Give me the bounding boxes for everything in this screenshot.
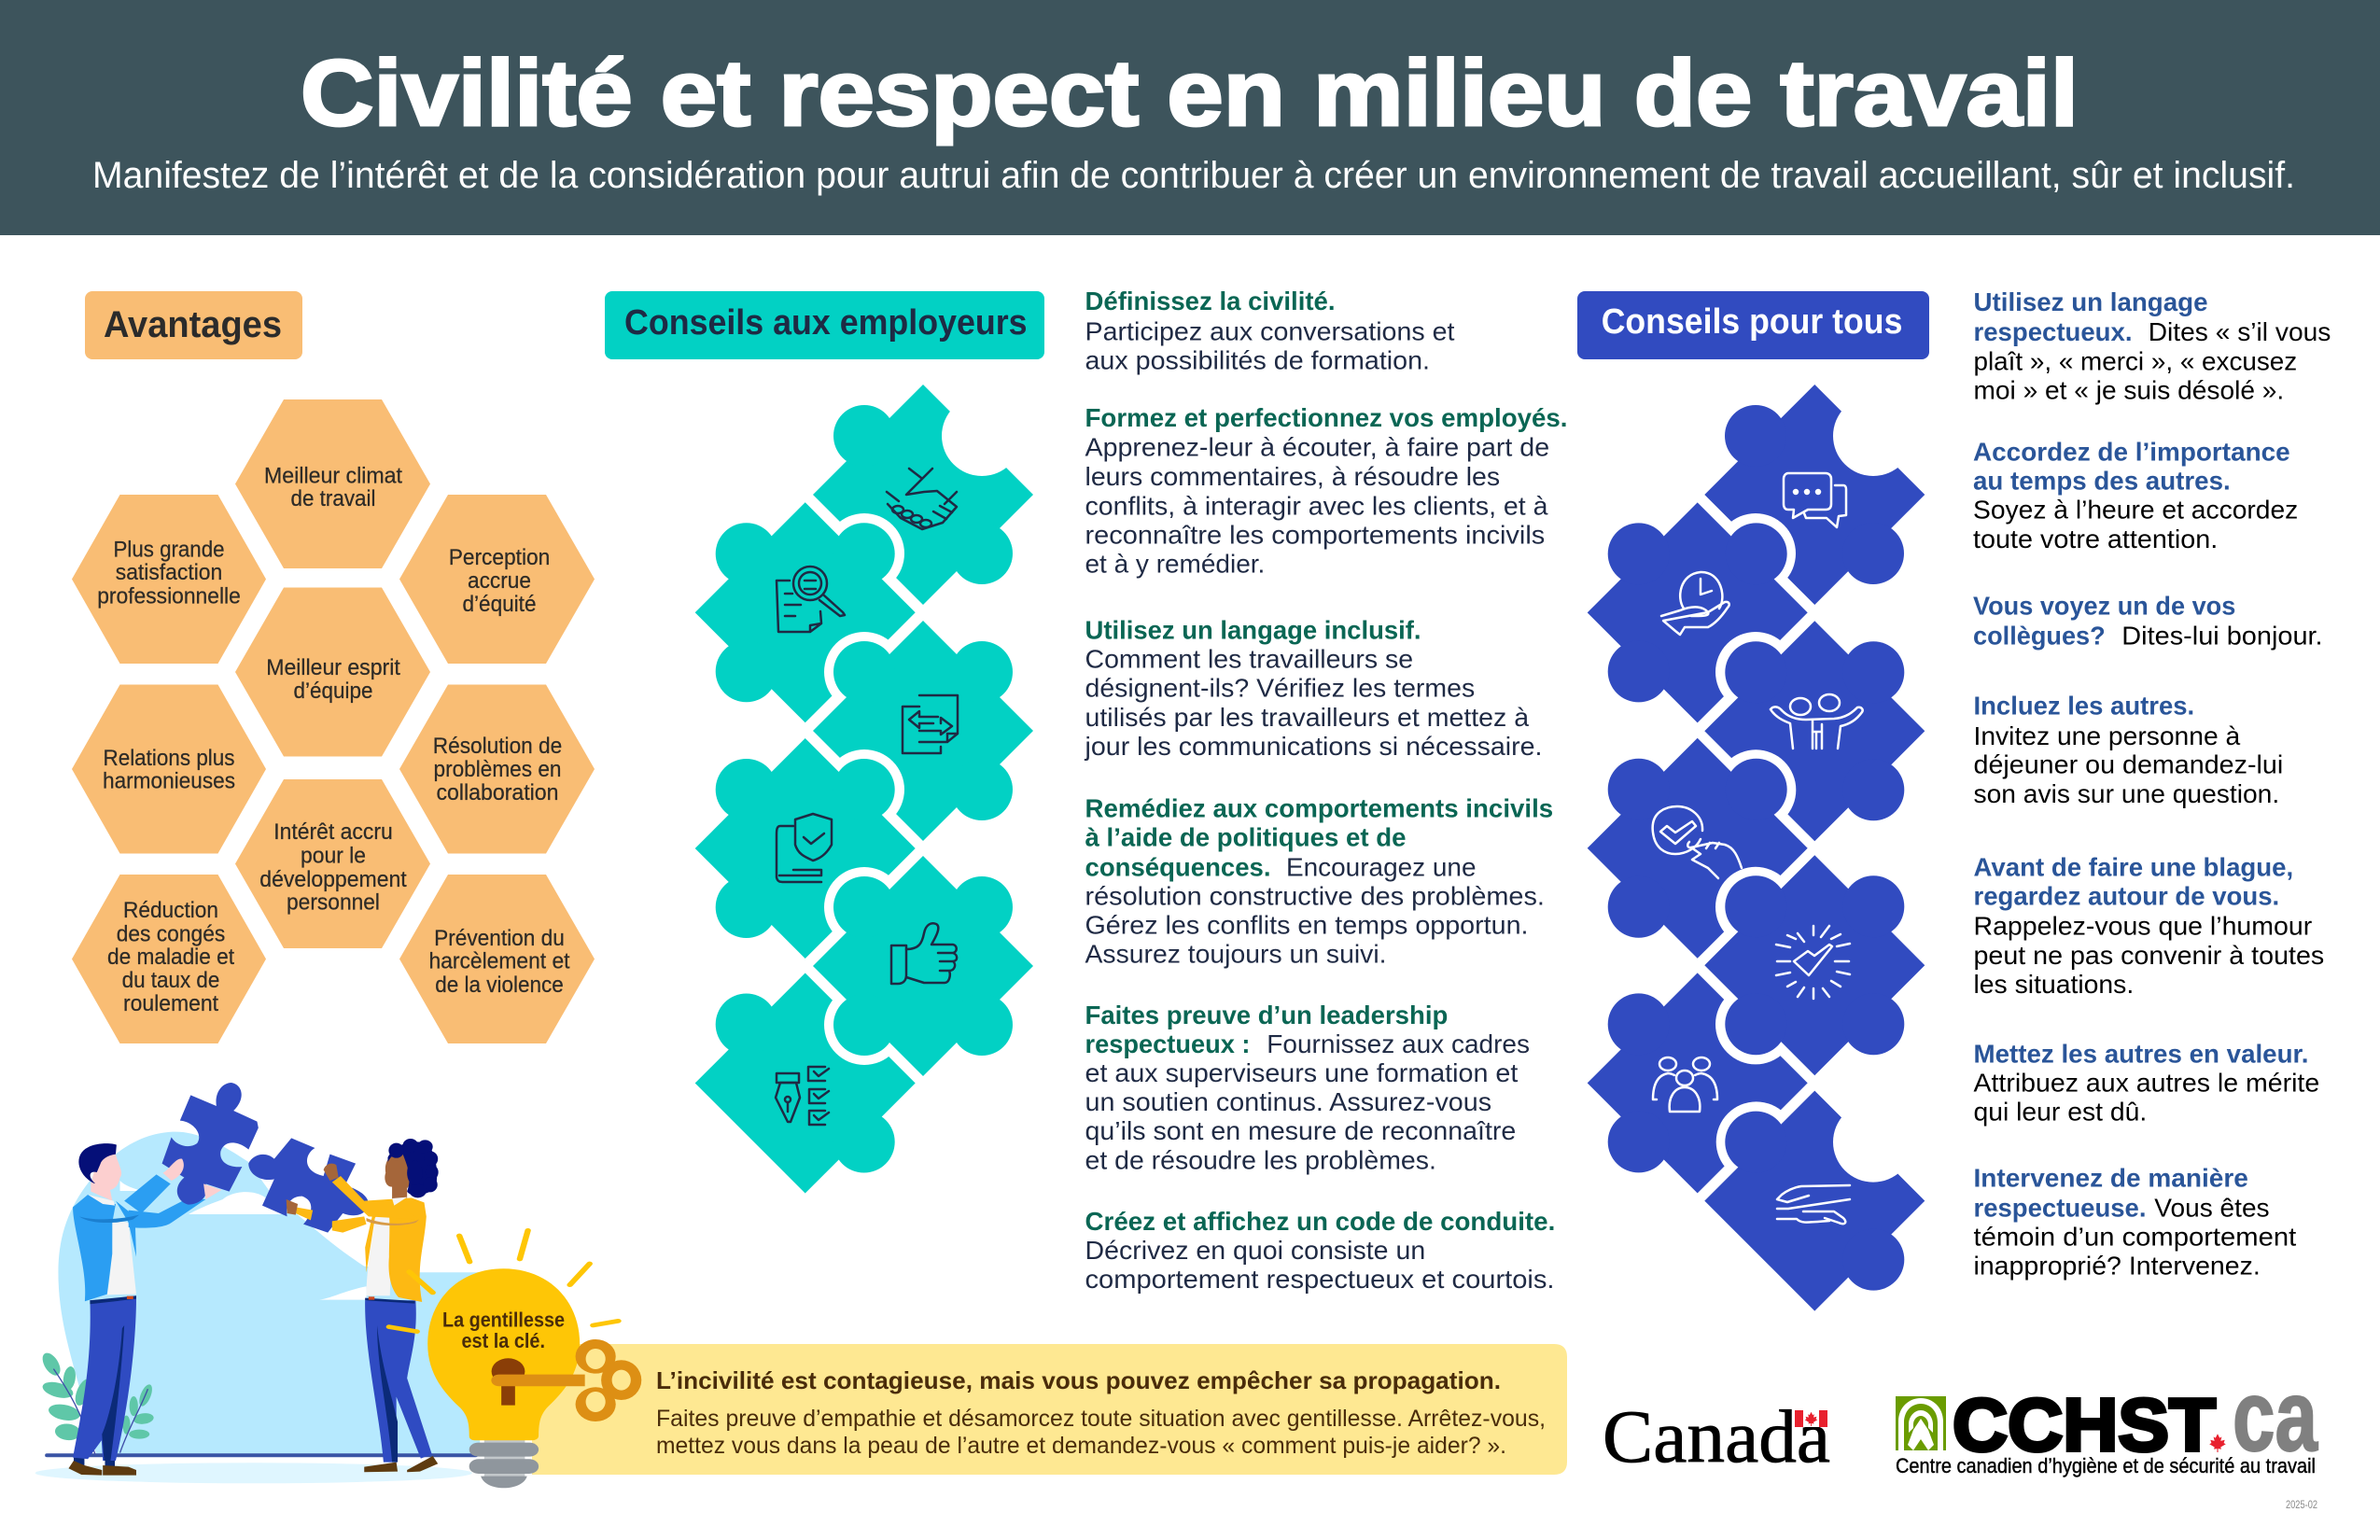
hexagon: Meilleur esprit d'équipe: Meilleur esprit <box>266 655 400 680</box>
tip: Mettez les autres en valeur: Mettez les autres en valeur. <box>1973 1039 2309 1068</box>
tip: Créez et affichez un code de conduite: comportement respectueux et courtois. <box>1085 1265 1555 1294</box>
icon: group of three <box>1653 1057 1717 1112</box>
date code: 2025-02 <box>2286 1498 2317 1511</box>
tip: Remédiez aux comportements incivils: Encouragez une <box>1286 852 1477 881</box>
puzzle piece 1 teal <box>813 385 1033 605</box>
puzzle piece 4 teal <box>695 738 916 959</box>
heading: Conseils aux employeurs: Conseils aux employeurs <box>624 303 1028 343</box>
tip: Avant de faire une blague: regardez autour de vous. <box>1973 881 2279 910</box>
puzzle piece held by man <box>162 1083 259 1205</box>
tip: Utilisez un langage inclusif: Utilisez un langage inclusif. <box>1085 616 1421 644</box>
tip: Utilisez un langage respectueux: Dites « s’il vous <box>2149 317 2331 346</box>
title: Civilité et respect en milieu de travail <box>301 41 2079 146</box>
icon: check with sparkle rays <box>1776 926 1850 999</box>
hexagon: Réduction des congés de maladie: Réduction <box>123 898 218 923</box>
tip: Utilisez un langage respectueux: respectueux. <box>1973 317 2132 346</box>
background blob <box>58 1132 480 1456</box>
tip: Faites preuve d'un leadership respectueux: Fournissez aux cadres <box>1267 1029 1530 1058</box>
hexagon: Meilleur climat de travail <box>235 399 430 568</box>
tip: Incluez les autres: son avis sur une question. <box>1973 779 2279 808</box>
tip: Incluez les autres: Incluez les autres. <box>1973 692 2194 721</box>
hexagon: Perception accrue d'équité <box>399 495 595 664</box>
tip: Utilisez un langage respectueux <box>1973 287 2331 405</box>
panel: blue puzzle column <box>1588 385 1925 1311</box>
tip: Avant de faire une blague: les situations. <box>1973 970 2134 999</box>
puzzle piece 2 teal <box>695 502 916 722</box>
tip: Utilisez un langage inclusif: désignent-ils? Vérifiez les termes <box>1085 674 1475 702</box>
tip: Utilisez un langage respectueux: Utilisez un langage <box>1973 287 2208 316</box>
tip: Remédiez aux comportements incivils: Gérez les conflits en temps opportun. <box>1085 911 1529 940</box>
icon: pointing at check mark <box>1653 806 1742 878</box>
tip: Accordez de l'importance: Accordez de l’importance <box>1973 438 2290 467</box>
hexagon: Prévention du harcèlement <box>399 875 595 1043</box>
tip: Formez et perfectionnez: Apprenez-leur à écouter, à faire part de <box>1085 433 1549 461</box>
man hands <box>162 1159 221 1199</box>
hexagon: Meilleur climat de travail: de travail <box>291 486 375 511</box>
tip: Avant de faire une blague <box>1973 852 2324 999</box>
tip: Remédiez aux comportements incivils: résolution constructive des problèmes. <box>1085 881 1545 910</box>
heading: Conseils aux employeurs <box>605 291 1044 359</box>
bulb caption <box>442 1309 565 1352</box>
icon: chat bubbles <box>1784 473 1846 527</box>
key <box>491 1339 641 1421</box>
puzzle piece 5 teal <box>813 856 1033 1076</box>
icon: clock in hand <box>1661 572 1729 635</box>
icon: shield and book <box>777 814 832 882</box>
hexagon: Réduction des congés de maladie: des congés <box>117 922 225 946</box>
hexagon: Réduction des congés de maladie: roulement <box>123 991 218 1016</box>
tip: Formez et perfectionnez: et à y remédier. <box>1085 549 1265 579</box>
tip: Remédiez aux comportements incivils: Remédiez aux comportements incivils <box>1085 794 1553 823</box>
tip: Faites preuve d'un leadership respectueux: et aux superviseurs une formation et <box>1085 1058 1519 1087</box>
tip: Mettez les autres en valeur <box>1973 1039 2319 1127</box>
tip: Utilisez un langage inclusif <box>1084 616 1542 761</box>
heading: Avantages: Avantages <box>104 304 282 345</box>
tip: Intervenez de manière respectueuse: Intervenez de manière <box>1973 1164 2248 1193</box>
subtitle: Manifestez de l’intérêt et de la considération pour autrui afin de contribuer à créer un environnement de travail accueillant, sûr et inclusif. <box>92 155 2295 196</box>
tip: Remédiez aux comportements incivils: Assurez toujours un suivi. <box>1085 940 1387 969</box>
tip: Vous voyez un de vos collègues: collègues? <box>1973 622 2106 651</box>
panel: everyone tips text <box>1973 287 2331 1280</box>
icon: document with magnifier <box>777 567 845 632</box>
tip: Avant de faire une blague: Rappelez-vous que l’humour <box>1973 912 2312 941</box>
tip: Mettez les autres en valeur: Attribuez aux autres le mérite <box>1973 1069 2319 1098</box>
puzzle piece 3 blue <box>1704 621 1925 841</box>
hexagon: Réduction des congés de maladie <box>72 875 266 1043</box>
icon: two people together <box>1771 694 1863 749</box>
tip: Créez et affichez un code de conduite: Créez et affichez un code de conduite. <box>1085 1207 1555 1236</box>
tip: Définissez la civilité: Participez aux conversations et <box>1085 317 1455 346</box>
logo: CCHST.ca: CCHST <box>1953 1383 2216 1466</box>
tip: Accordez de l'importance: Soyez à l’heure et accordez <box>1973 496 2298 525</box>
light bulb <box>427 1268 641 1488</box>
flag <box>1795 1410 1827 1427</box>
maple leaf <box>2209 1434 2226 1452</box>
hexagon: Perception accrue d'équité: Perception <box>449 545 550 570</box>
puzzle piece 7 blue <box>1704 1091 1925 1311</box>
CCHST emblem <box>1896 1396 1946 1450</box>
tip: Formez et perfectionnez: reconnaître les comportements incivils <box>1085 521 1545 549</box>
clouds <box>120 1181 367 1300</box>
hexagon: Prévention du harcèlement: de la violence <box>435 973 564 998</box>
hexagon: Meilleur esprit d'équipe: d’équipe <box>293 679 373 704</box>
hexagon: Résolution de problèmes en collaboration: problèmes en <box>433 757 562 782</box>
hexagon: Intérêt accru pour le développement personnel <box>235 779 430 948</box>
hexagon: Prévention du harcèlement: Prévention du <box>434 926 565 951</box>
ground ellipse <box>35 1463 472 1483</box>
tip: Faites preuve d'un leadership respectueux: un soutien continus. Assurez-vous <box>1085 1087 1491 1116</box>
tip: Accordez de l'importance <box>1973 438 2298 553</box>
hexagon: Relations plus harmonieuses <box>72 685 266 853</box>
tip: Créez et affichez un code de conduite <box>1085 1207 1555 1294</box>
hexagon: Perception accrue d'équité: accrue <box>468 568 531 594</box>
header banner <box>0 0 2380 235</box>
tip: Remédiez aux comportements incivils <box>1085 794 1553 969</box>
icon: documents exchange <box>903 695 958 753</box>
light rays <box>389 1230 618 1332</box>
tip: Définissez la civilité: aux possibilités de formation. <box>1085 345 1430 375</box>
logo: CCHST.ca: ca <box>2233 1359 2318 1472</box>
hexagon: Plus grande satisfaction professionnelle: Plus grande <box>114 538 224 562</box>
hexagon: Intérêt accru pour le développement personnel: personnel <box>287 889 380 915</box>
hexagon: Prévention du harcèlement: harcèlement et <box>429 948 570 974</box>
tip: Intervenez de manière respectueuse: témoin d’un comportement <box>1973 1222 2296 1251</box>
callout body <box>656 1406 1546 1459</box>
hexagon: Relations plus harmonieuses: harmonieuses <box>103 769 235 793</box>
tip: Intervenez de manière respectueuse <box>1973 1164 2296 1280</box>
tip: Intervenez de manière respectueuse: inapproprié? Intervenez. <box>1973 1251 2261 1280</box>
puzzle piece held by woman <box>248 1138 369 1233</box>
tip: Utilisez un langage respectueux: moi » et « je suis désolé ». <box>1973 376 2284 405</box>
callout heading: L’incivilité est contagieuse, mais vous pouvez empêcher sa propagation. <box>656 1366 1501 1394</box>
puzzle piece 4 blue <box>1588 738 1808 959</box>
puzzle piece 6 teal <box>695 973 916 1193</box>
panel: employer tips text <box>1084 287 1568 1294</box>
plants <box>39 1351 155 1454</box>
bulb caption: La gentillesse <box>442 1309 565 1332</box>
tip: Formez et perfectionnez <box>1085 403 1568 579</box>
hexagon: Intérêt accru pour le développement personnel: pour le <box>301 844 366 868</box>
hexagon: Plus grande satisfaction professionnelle: satisfaction <box>116 560 222 585</box>
tip: Intervenez de manière respectueuse: Vous êtes <box>2154 1193 2270 1222</box>
man figure <box>68 1143 205 1476</box>
hexagon: Réduction des congés de maladie: de maladie et <box>107 945 234 970</box>
callout body: mettez vous dans la peau de l’autre et demandez-vous « comment puis-je aider? ». <box>656 1433 1506 1459</box>
tip: Intervenez de manière respectueuse: respectueuse. <box>1973 1193 2147 1222</box>
hexagon: Perception accrue d'équité: d’équité <box>463 592 536 617</box>
illustration: two people assembling puzzle <box>35 1083 641 1488</box>
puzzle piece 5 blue <box>1704 855 1925 1075</box>
puzzle piece 3 teal <box>813 621 1033 841</box>
bulb caption: est la clé. <box>461 1329 545 1352</box>
logo: Canada wordmark: Canada <box>1603 1396 1830 1478</box>
heading: Conseils pour tous <box>1577 291 1929 359</box>
heading: Conseils pour tous: Conseils pour tous <box>1602 302 1902 342</box>
hexagon: Intérêt accru pour le développement personnel: développement <box>259 867 407 892</box>
tip: Formez et perfectionnez: Formez et perfectionnez vos employés. <box>1085 403 1568 432</box>
ground line <box>45 1453 478 1457</box>
tip: Accordez de l'importance: toute votre attention. <box>1973 525 2218 553</box>
icon: pen and checklist <box>776 1067 829 1125</box>
tip: Incluez les autres: Invitez une personne à <box>1973 721 2241 750</box>
hexagon: Réduction des congés de maladie: du taux de <box>122 968 219 993</box>
hexagon: Plus grande satisfaction professionnelle: professionnelle <box>97 583 241 609</box>
icon: helping hands <box>1777 1185 1850 1224</box>
puzzle piece 6 blue <box>1588 973 1808 1193</box>
tip: Définissez la civilité: Définissez la civilité. <box>1085 287 1335 315</box>
tip: Vous voyez un de vos collègues <box>1973 592 2323 651</box>
tip: Avant de faire une blague: peut ne pas convenir à toutes <box>1973 941 2324 970</box>
callout body: Faites preuve d’empathie et désamorcez toute situation avec gentillesse. Arrêtez-vous, <box>656 1406 1546 1432</box>
tip: Faites preuve d'un leadership respectueux: et de résoudre les problèmes. <box>1085 1145 1436 1174</box>
hexagon: Résolution de problèmes en collaboration <box>399 685 595 853</box>
hexagon: Résolution de problèmes en collaboration: collaboration <box>437 780 558 805</box>
tip: Remédiez aux comportements incivils: à l’aide de politiques et de <box>1085 823 1406 852</box>
tip: Accordez de l'importance: au temps des autres. <box>1973 467 2231 496</box>
tip: Utilisez un langage inclusif: Comment les travailleurs se <box>1085 644 1413 674</box>
CCHST tagline: Centre canadien d’hygiène et de sécurité au travail <box>1896 1454 2316 1477</box>
keyhole <box>492 1358 525 1406</box>
woman figure <box>287 1139 439 1472</box>
hexagon: Meilleur esprit d'équipe <box>235 588 430 756</box>
tip: Incluez les autres <box>1973 692 2283 808</box>
hexagon: Résolution de problèmes en collaboration: Résolution de <box>433 734 562 759</box>
tip: Faites preuve d'un leadership respectueux <box>1085 1001 1530 1174</box>
icon: handshake <box>887 469 957 529</box>
tip: Faites preuve d'un leadership respectueux: qu’ils sont en mesure de reconnaître <box>1085 1116 1516 1145</box>
tip: Formez et perfectionnez: conflits, à interagir avec les clients, et à <box>1085 491 1548 521</box>
hexagon: Relations plus harmonieuses: Relations plus <box>103 746 235 771</box>
tip: Incluez les autres: déjeuner ou demandez-lui <box>1973 750 2283 779</box>
tip: Créez et affichez un code de conduite: Décrivez en quoi consiste un <box>1085 1236 1425 1265</box>
hexagon: Meilleur climat de travail: Meilleur climat <box>264 463 402 489</box>
tip: Utilisez un langage inclusif: jour les communications si nécessaire. <box>1084 732 1542 761</box>
tip: Mettez les autres en valeur: qui leur est dû. <box>1973 1098 2147 1127</box>
tip: Utilisez un langage inclusif: utilisés par les travailleurs et mettez à <box>1085 703 1530 732</box>
heading: Avantages <box>85 291 302 359</box>
icon: thumbs up <box>891 923 957 984</box>
tip: Faites preuve d'un leadership respectueux: respectueux : <box>1085 1029 1251 1058</box>
panel: benefits hexagons <box>72 399 595 1043</box>
tip: Remédiez aux comportements incivils: conséquences. <box>1085 852 1271 881</box>
puzzle piece 2 blue <box>1588 502 1808 722</box>
tip: Faites preuve d'un leadership respectueux: Faites preuve d’un leadership <box>1085 1001 1448 1029</box>
callout: yellow band <box>532 1344 1567 1475</box>
logo: CCHST.ca <box>1896 1359 2318 1477</box>
hexagon: Intérêt accru pour le développement personnel: Intérêt accru <box>273 819 393 845</box>
tip: Vous voyez un de vos collègues: Vous voyez un de vos <box>1973 592 2235 621</box>
puzzle piece 1 blue <box>1704 385 1925 605</box>
tip: Définissez la civilité <box>1085 287 1455 375</box>
tip: Avant de faire une blague: Avant de faire une blague, <box>1973 852 2293 881</box>
tip: Utilisez un langage respectueux: plaît », « merci », « excusez <box>1973 347 2297 376</box>
tip: Vous voyez un de vos collègues: Dites-lui bonjour. <box>2121 622 2323 651</box>
hexagon: Plus grande satisfaction professionnelle <box>72 495 266 664</box>
panel: teal puzzle column <box>695 385 1033 1193</box>
tip: Formez et perfectionnez: leurs commentaires, à résoudre les <box>1085 462 1500 491</box>
